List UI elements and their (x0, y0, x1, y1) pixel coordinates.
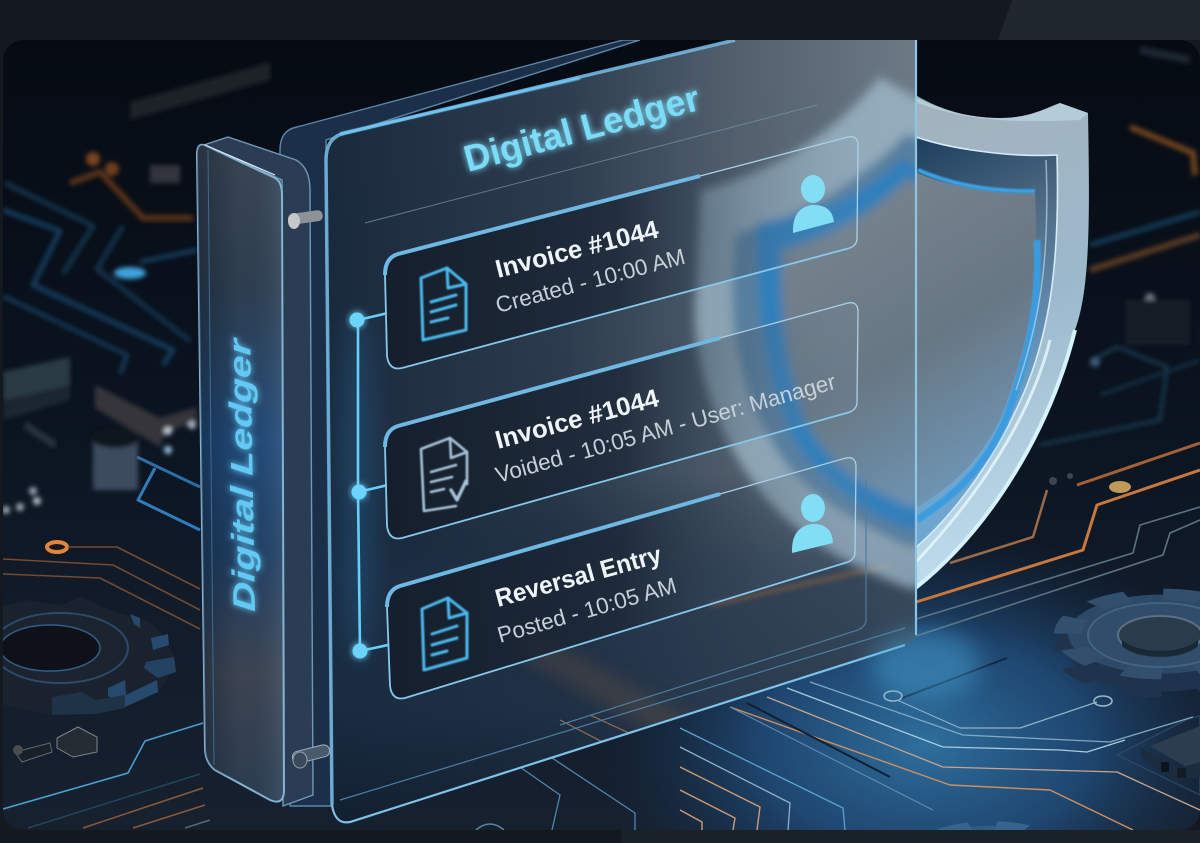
sharp shield right of glass (917, 96, 1089, 590)
text: reversal entry title: Reversal Entry (492, 541, 665, 613)
text: voided by manager: Voided - 10:05 AM - User: Manager (493, 369, 839, 488)
heading: Digital Ledger (459, 77, 704, 180)
text: invoice 1044 void title: Invoice #1044 (492, 384, 663, 455)
slab face (197, 145, 284, 802)
ledger timeline (340, 311, 388, 661)
front glass plate body (326, 40, 916, 822)
gear bottom (938, 821, 1030, 830)
card: invoice voided (385, 303, 858, 539)
icon: document with check (421, 438, 467, 511)
left bright traces (3, 457, 210, 828)
slab label: Digital Ledger (222, 336, 262, 612)
text: invoice 1044 title: Invoice #1044 (493, 216, 662, 284)
glass plate edges (326, 40, 916, 822)
blurred background circuitry left (2, 62, 270, 514)
circuit traces lower right (476, 443, 1200, 830)
glow at plate base (870, 630, 980, 700)
hinge top (287, 210, 324, 229)
lighter band bottom right (622, 830, 1200, 843)
text: created time: Created - 10:00 AM (493, 244, 688, 318)
small components (57, 727, 97, 757)
chip bottom right (1117, 716, 1200, 795)
back glass plate (280, 40, 640, 806)
icon: user (792, 494, 833, 553)
blurred shield seen through glass (520, 77, 1089, 782)
glass plate (280, 40, 916, 822)
icon: user (793, 175, 834, 233)
gear left (0, 597, 176, 762)
icon: document (422, 598, 467, 670)
traces seen through glass (526, 564, 888, 742)
side slab (197, 137, 313, 806)
card: invoice created (385, 137, 858, 369)
card: reversal entry (387, 458, 856, 699)
icon: document (421, 268, 466, 340)
gear right (1068, 595, 1200, 691)
slab edge (204, 137, 313, 806)
lighter corner top right (998, 0, 1200, 40)
inner glass outline (560, 480, 866, 725)
hinge bottom (291, 744, 331, 768)
blurred background circuitry right (1040, 50, 1200, 445)
text: posted time: Posted - 10:05 AM (494, 573, 679, 648)
